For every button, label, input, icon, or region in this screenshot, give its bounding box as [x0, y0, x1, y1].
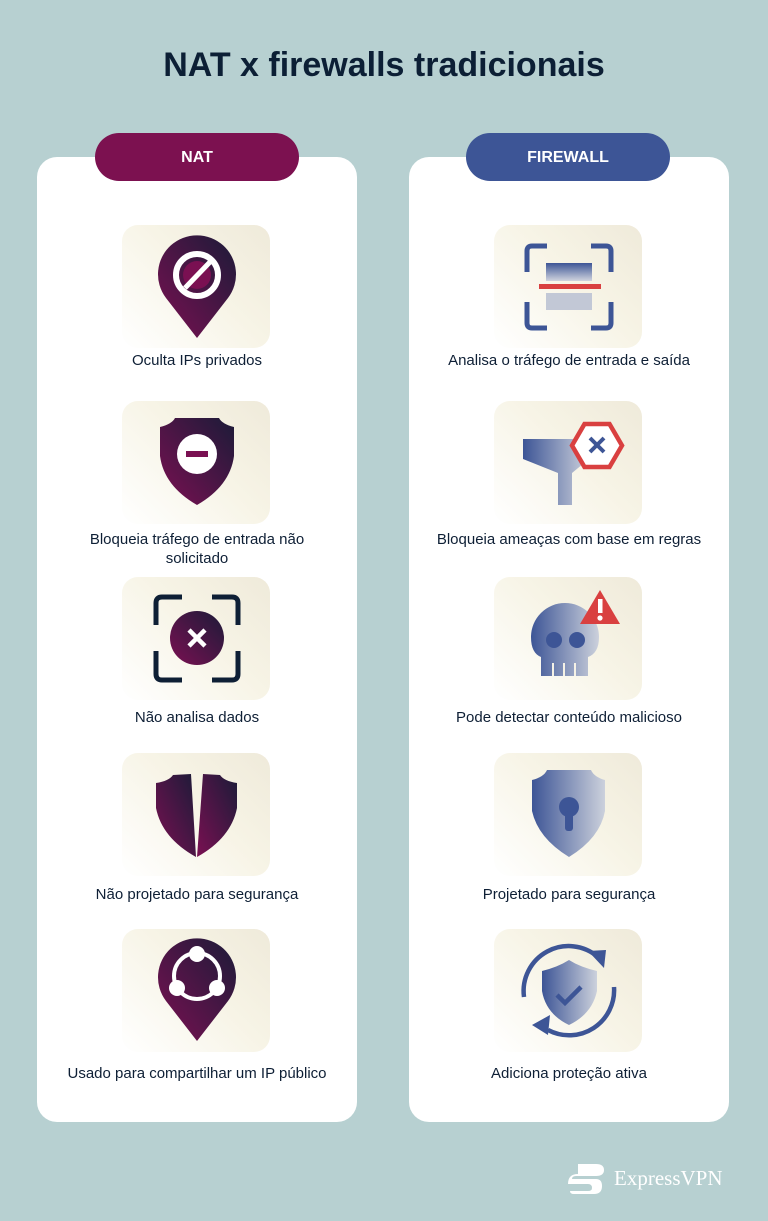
- icon: shield minus: [122, 401, 270, 524]
- pill: FIREWALL: [466, 133, 670, 181]
- label: Usado para compartilhar um IP público: [67, 1065, 327, 1082]
- label: Adiciona proteção ativa: [491, 1065, 647, 1082]
- icon: shield check with arrows: [494, 929, 642, 1052]
- panel: firewall: [409, 157, 729, 1122]
- label: [90, 531, 304, 567]
- pill: NAT: NAT: [181, 149, 213, 166]
- label: Pode detectar conteúdo malicioso: [456, 709, 682, 726]
- icon: scan with x: [122, 577, 270, 700]
- icon: skull warning: [494, 577, 642, 700]
- icon: shield keyhole: [494, 753, 642, 876]
- label: Analisa o tráfego de entrada e saída: [448, 352, 690, 369]
- icon: scanner: [494, 225, 642, 348]
- icon: pin with share: [122, 929, 270, 1052]
- logo: ExpressVPN: [568, 1164, 722, 1194]
- label: Não analisa dados: [135, 709, 259, 726]
- title: NAT x firewalls tradicionais: [163, 46, 605, 84]
- pill: NAT: [95, 133, 299, 181]
- label: Bloqueia tráfego de entrada não: [90, 531, 304, 548]
- label: Não projetado para segurança: [96, 886, 298, 903]
- label: Oculta IPs privados: [132, 352, 262, 369]
- label: Projetado para segurança: [483, 886, 655, 903]
- logo: ExpressVPN: ExpressVPN: [614, 1166, 722, 1190]
- label: Bloqueia ameaças com base em regras: [437, 531, 701, 548]
- icon: pin with block sign: [122, 225, 270, 348]
- icon: funnel with hexagon: [494, 401, 642, 524]
- label: solicitado: [166, 550, 228, 567]
- panel: NAT: [37, 157, 357, 1122]
- pill: FIREWALL: FIREWALL: [527, 149, 609, 166]
- icon: split shield: [122, 753, 270, 876]
